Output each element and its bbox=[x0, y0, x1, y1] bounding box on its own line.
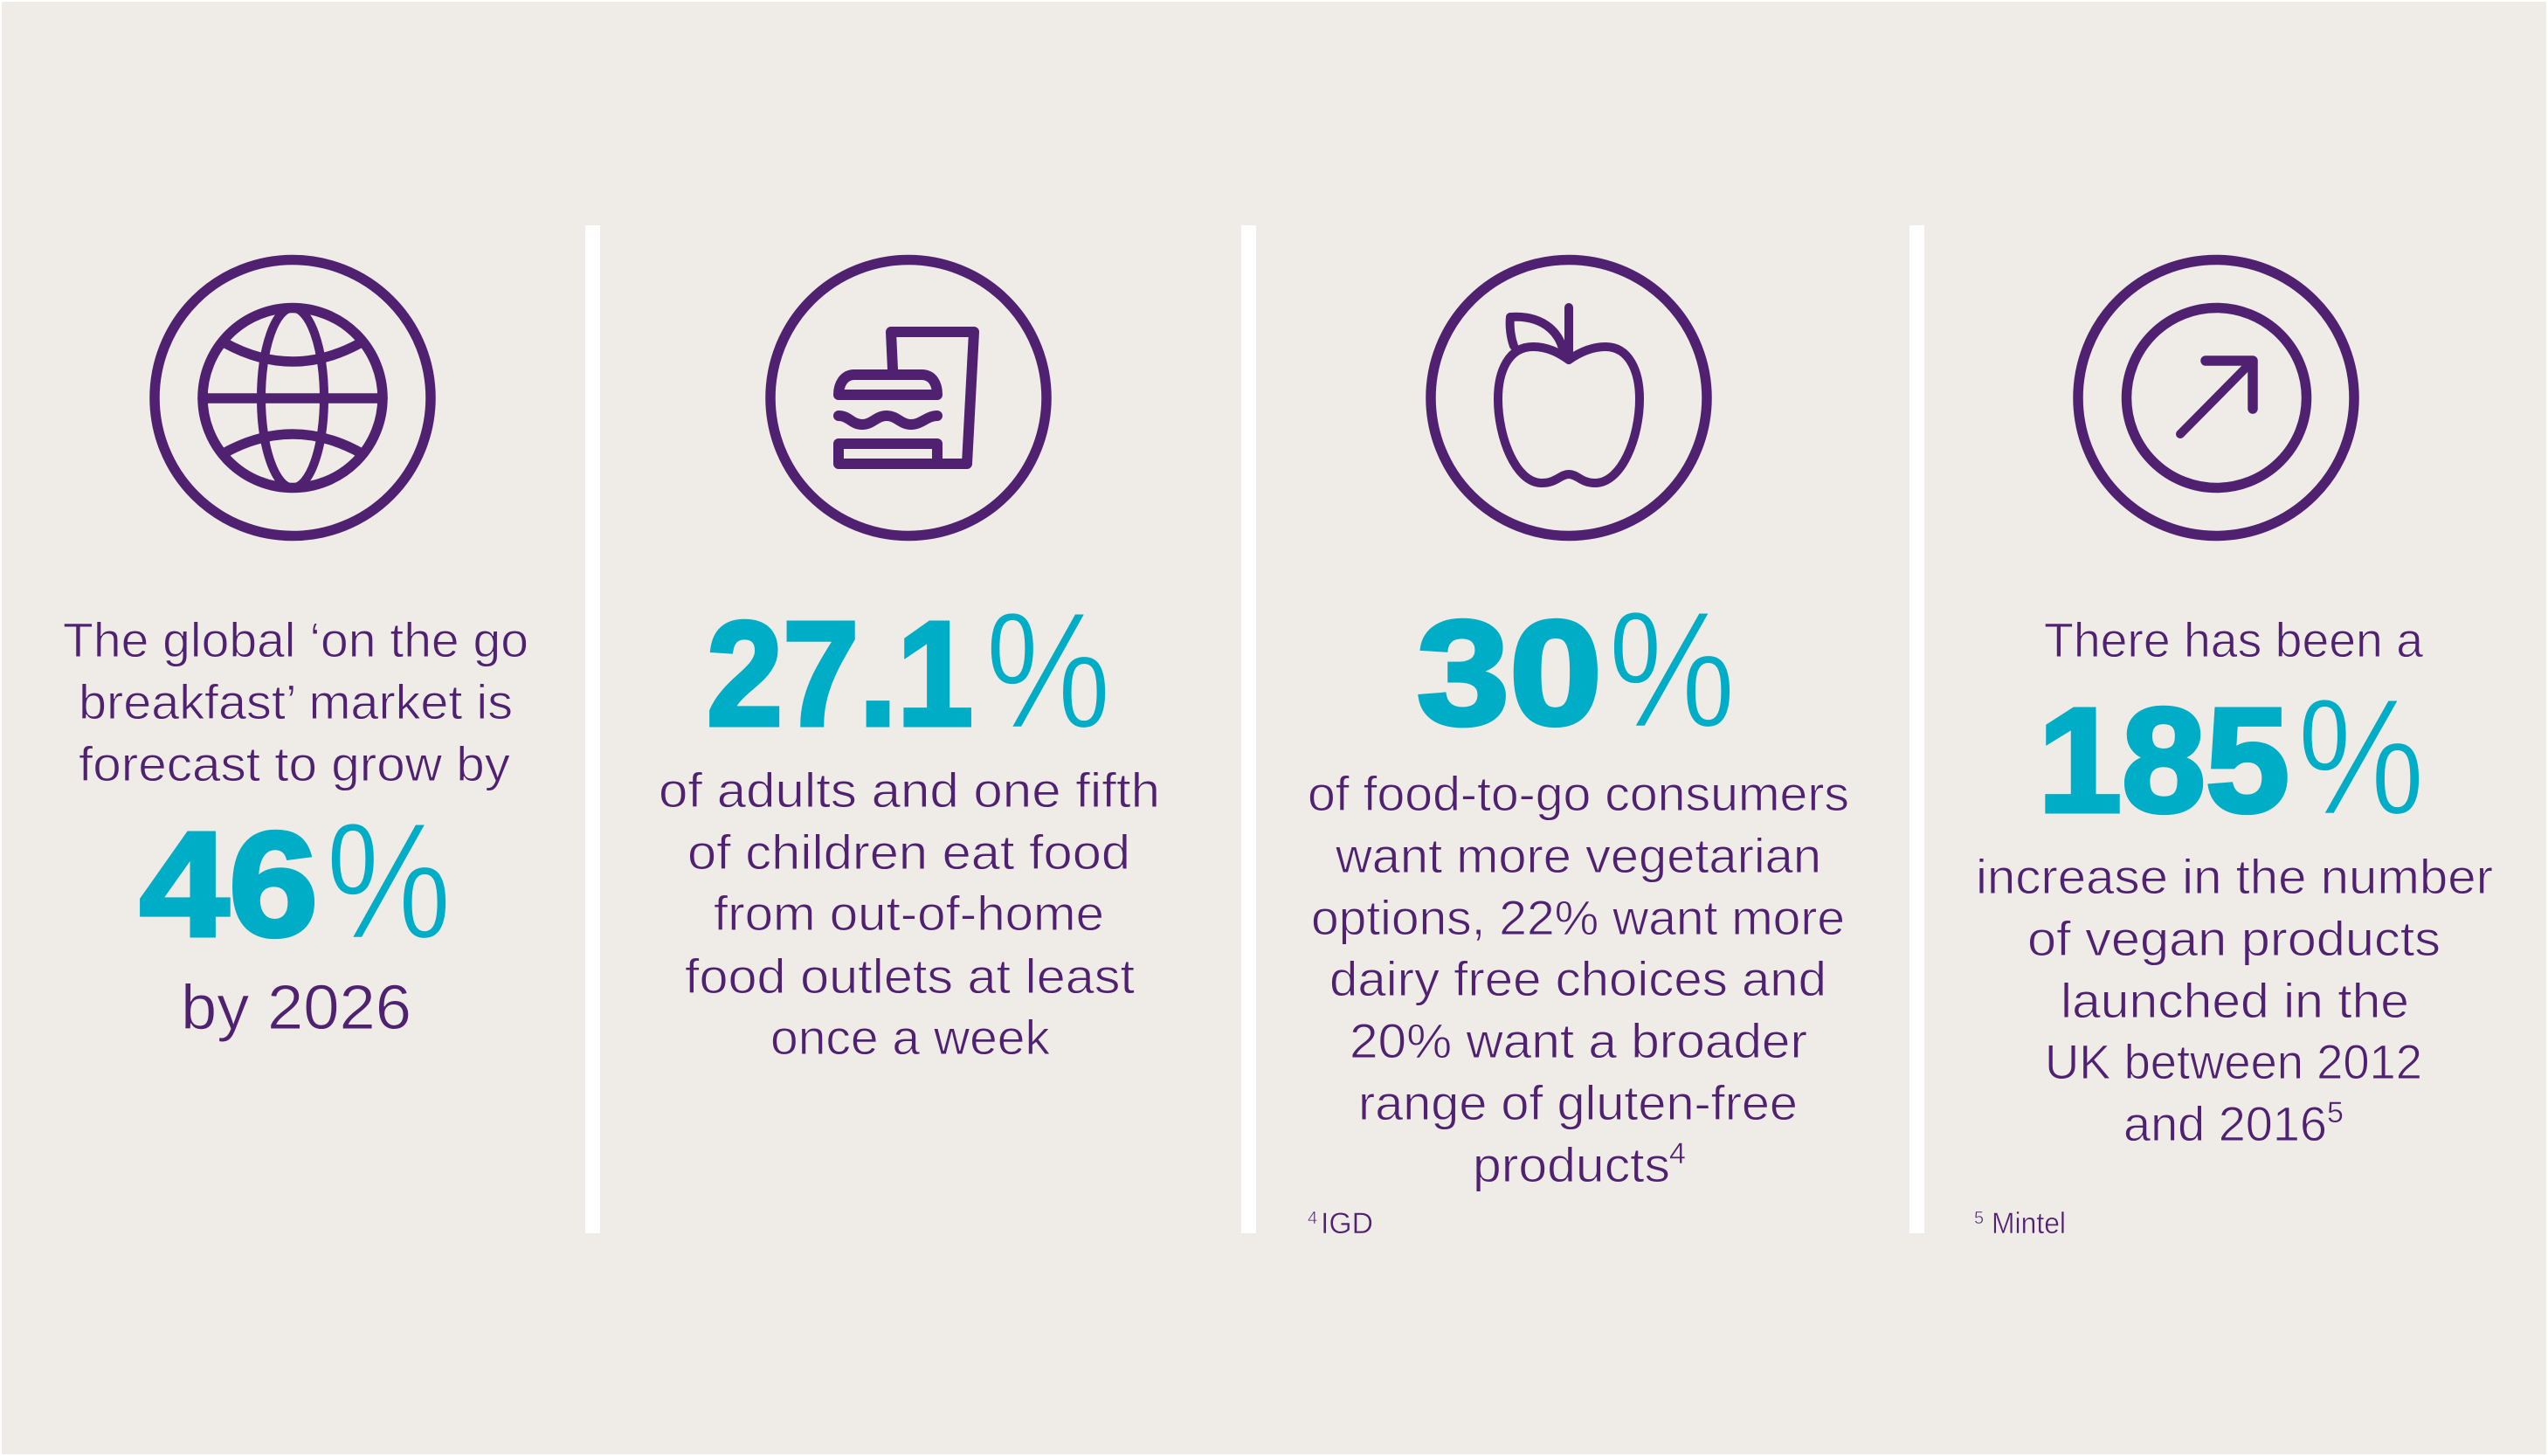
text: market intro: breakfast’ market is bbox=[79, 674, 513, 729]
icon: upward arrow bbox=[2078, 260, 2354, 536]
text: market intro: forecast to grow by bbox=[79, 736, 510, 791]
text: consumer preferences: products bbox=[1473, 1137, 1670, 1192]
text: consumer preferences: 20% want a broader bbox=[1350, 1013, 1807, 1068]
text: consumer preferences: want more vegetarian bbox=[1335, 828, 1821, 883]
footnote: Mintel: Mintel bbox=[1992, 1207, 2066, 1240]
statistic: 185%: 185 bbox=[2038, 678, 2289, 844]
panel: out-of-home eating bbox=[659, 260, 1160, 1065]
text: vegan description: of vegan products bbox=[2027, 911, 2441, 966]
icon: apple bbox=[1431, 260, 1707, 536]
footnote: IGD: IGD bbox=[1321, 1207, 1373, 1240]
statistic: 46% bbox=[140, 789, 452, 974]
text: consumer preferences: dairy free choices and bbox=[1329, 951, 1826, 1006]
icon: globe bbox=[155, 260, 431, 536]
text: adults and children description: from out-of-home bbox=[714, 886, 1104, 941]
text: consumer preferences: range of gluten-free bbox=[1358, 1075, 1798, 1130]
statistic: 185%: % bbox=[2297, 665, 2425, 850]
statistic: 46%: % bbox=[326, 789, 452, 974]
text: vegan description bbox=[1976, 849, 2493, 1151]
text: vegan description: and 2016 bbox=[2123, 1096, 2327, 1151]
text: consumer preferences: 4 bbox=[1669, 1137, 1686, 1170]
text: adults and children description bbox=[659, 763, 1160, 1065]
statistic: 185% bbox=[2038, 665, 2425, 850]
text: vegan description: UK between 2012 bbox=[2045, 1034, 2422, 1089]
statistic: 30% bbox=[1417, 577, 1736, 763]
icon: burger and drink bbox=[770, 260, 1046, 536]
statistic: 27.1%: 27.1 bbox=[707, 591, 973, 757]
statistic: 27.1% bbox=[707, 578, 1111, 763]
text: adults and children description: once a week bbox=[770, 1010, 1051, 1065]
text: market intro: The global ‘on the go bbox=[63, 612, 528, 667]
footnote: Mintel: 5 bbox=[1974, 1209, 1984, 1228]
text: consumer preferences: of food-to-go consumers bbox=[1308, 766, 1849, 821]
text: adults and children description: food outlets at least bbox=[685, 949, 1135, 1004]
text: by 2026: by 2026 bbox=[181, 973, 411, 1043]
footnote: IGD: 4 bbox=[1308, 1209, 1317, 1228]
panel: global breakfast market bbox=[63, 260, 528, 1043]
text: vegan intro: There has been a bbox=[2044, 612, 2424, 667]
statistic: 46%: 46 bbox=[140, 802, 318, 968]
panel: vegan products bbox=[1974, 260, 2493, 1240]
statistic: 30%: % bbox=[1608, 577, 1736, 763]
statistic: 27.1%: % bbox=[985, 578, 1111, 763]
text: market intro bbox=[63, 612, 528, 791]
text: consumer preferences bbox=[1308, 766, 1849, 1192]
text: vegan description: increase in the number bbox=[1976, 849, 2493, 904]
text: vegan description: 5 bbox=[2327, 1096, 2344, 1129]
text: consumer preferences: options, 22% want more bbox=[1311, 890, 1845, 945]
text: vegan description: launched in the bbox=[2061, 973, 2409, 1028]
panel: vegetarian options bbox=[1308, 260, 1849, 1240]
statistic: 30%: 30 bbox=[1417, 590, 1602, 756]
text: adults and children description: of children eat food bbox=[687, 825, 1130, 880]
text: adults and children description: of adults and one fifth bbox=[659, 763, 1160, 818]
